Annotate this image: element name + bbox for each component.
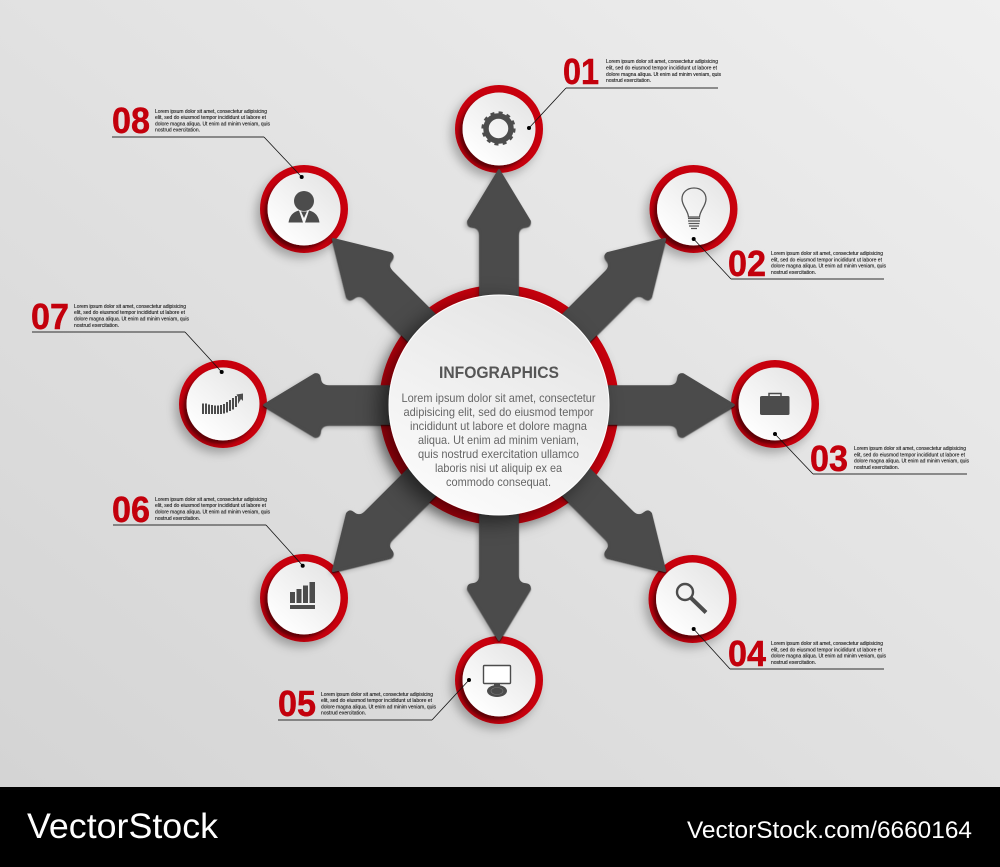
- callout 08: 08: [112, 100, 150, 141]
- callout 04: elit, sed do eiusmod tempor incididunt ut labore et: [771, 648, 883, 654]
- callout 06: dolore magna aliqua. Ut enim ad minim veniam, quis: [155, 510, 270, 516]
- central body text: incididunt ut labore et dolore magna: [410, 419, 587, 433]
- arrow to 04: [548, 454, 686, 592]
- node 03 circle: [731, 360, 819, 448]
- node 08 circle: [260, 165, 348, 253]
- callout 02: dolore magna aliqua. Ut enim ad minim veniam, quis: [771, 264, 886, 270]
- eight radial arrows: [264, 170, 734, 640]
- arrow to 05: [468, 505, 530, 640]
- icon: magnifier: [677, 584, 706, 612]
- callout 08: elit, sed do eiusmod tempor incididunt ut labore et: [155, 115, 267, 121]
- callout 08: Lorem ipsum dolor sit amet, consectetur adipisicing: [155, 109, 267, 115]
- central body text: adipisicing elit, sed do eiusmod tempor: [404, 405, 594, 419]
- arrow to 02: [548, 218, 686, 356]
- callout 03: elit, sed do eiusmod tempor incididunt ut labore et: [854, 452, 966, 458]
- central white circle: [389, 295, 609, 515]
- callout 05: nostrud exercitation.: [321, 710, 366, 716]
- footer image id: VectorStock.com/6660164: [687, 817, 972, 844]
- arrow to 08: [312, 218, 450, 356]
- callout 04: [692, 627, 886, 674]
- callout 02: 02: [728, 243, 766, 284]
- callout 05: 05: [278, 683, 316, 724]
- callout 03: [773, 432, 969, 479]
- callout 06: [112, 489, 305, 568]
- callout 01: 01: [563, 51, 599, 92]
- callout 02: [692, 237, 886, 284]
- callout 07: nostrud exercitation.: [74, 323, 119, 329]
- central body text: quis nostrud exercitation ullamco: [418, 447, 579, 461]
- callout 01: dolore magna aliqua. Ut enim ad minim veniam, quis: [606, 72, 721, 78]
- callout 03: 03: [810, 438, 848, 479]
- callout 07: [31, 296, 224, 374]
- node 02 circle: [650, 165, 738, 253]
- arrow to 06: [312, 454, 450, 592]
- callout 06: Lorem ipsum dolor sit amet, consectetur adipisicing: [155, 497, 267, 503]
- central body text: aliqua. Ut enim ad minim veniam,: [418, 433, 579, 447]
- footer band: [0, 787, 1000, 867]
- node 04 circle: [648, 555, 736, 643]
- callout 05: [278, 678, 471, 724]
- callout 07: elit, sed do eiusmod tempor incididunt ut labore et: [74, 310, 186, 316]
- callout 06: nostrud exercitation.: [155, 516, 200, 522]
- central body text: [402, 391, 596, 489]
- callout 02: nostrud exercitation.: [771, 270, 816, 276]
- node 01 circle: [455, 85, 543, 173]
- callout 03: dolore magna aliqua. Ut enim ad minim veniam, quis: [854, 458, 969, 464]
- icon: person: [288, 191, 320, 222]
- callout 08: [112, 100, 304, 179]
- callout 05: elit, sed do eiusmod tempor incididunt ut labore et: [321, 698, 433, 704]
- callout 04: Lorem ipsum dolor sit amet, consectetur adipisicing: [771, 641, 883, 647]
- icon: bar chart: [290, 582, 315, 609]
- callout 03: Lorem ipsum dolor sit amet, consectetur adipisicing: [854, 446, 966, 452]
- callout 08: nostrud exercitation.: [155, 128, 200, 134]
- callout 02: Lorem ipsum dolor sit amet, consectetur adipisicing: [771, 251, 883, 257]
- callout 05: Lorem ipsum dolor sit amet, consectetur adipisicing: [321, 692, 433, 698]
- callout 04: 04: [728, 633, 766, 674]
- node 05 circle: [455, 636, 543, 724]
- callout 02: elit, sed do eiusmod tempor incididunt ut labore et: [771, 258, 883, 264]
- footer logo text: VectorStock: [27, 807, 219, 846]
- icon: briefcase: [760, 394, 790, 415]
- callout 06: 06: [112, 489, 150, 530]
- central body text: laboris nisi ut aliquip ex ea: [435, 461, 562, 475]
- arrow to 07: [264, 374, 399, 436]
- callout 03: nostrud exercitation.: [854, 465, 899, 471]
- icon: light bulb: [682, 188, 706, 228]
- central heading: INFOGRAPHICS: [439, 364, 559, 382]
- callout 04: nostrud exercitation.: [771, 660, 816, 666]
- callout 04: dolore magna aliqua. Ut enim ad minim veniam, quis: [771, 654, 886, 660]
- arrow to 01: [468, 170, 530, 305]
- central red ring: [379, 285, 619, 525]
- callout 05: dolore magna aliqua. Ut enim ad minim veniam, quis: [321, 704, 436, 710]
- callout 01: nostrud exercitation.: [606, 78, 651, 84]
- icon: monitor: [484, 666, 510, 697]
- icon: gear: [483, 113, 514, 144]
- callout 06: elit, sed do eiusmod tempor incididunt ut labore et: [155, 503, 267, 509]
- callout 01: Lorem ipsum dolor sit amet, consectetur adipisicing: [606, 59, 718, 65]
- icon: rising trend: [203, 394, 243, 414]
- callout 08: dolore magna aliqua. Ut enim ad minim veniam, quis: [155, 122, 270, 128]
- callout 01: [527, 51, 721, 130]
- node 07 circle: [179, 360, 267, 448]
- node 06 circle: [260, 554, 348, 642]
- callout 07: dolore magna aliqua. Ut enim ad minim veniam, quis: [74, 316, 189, 322]
- callout 01: elit, sed do eiusmod tempor incididunt ut labore et: [606, 66, 718, 72]
- callout 07: Lorem ipsum dolor sit amet, consectetur adipisicing: [74, 304, 186, 310]
- central body text: Lorem ipsum dolor sit amet, consectetur: [402, 391, 596, 405]
- arrow to 03: [599, 374, 734, 436]
- central body text: commodo consequat.: [446, 475, 551, 489]
- callout 07: 07: [31, 296, 69, 337]
